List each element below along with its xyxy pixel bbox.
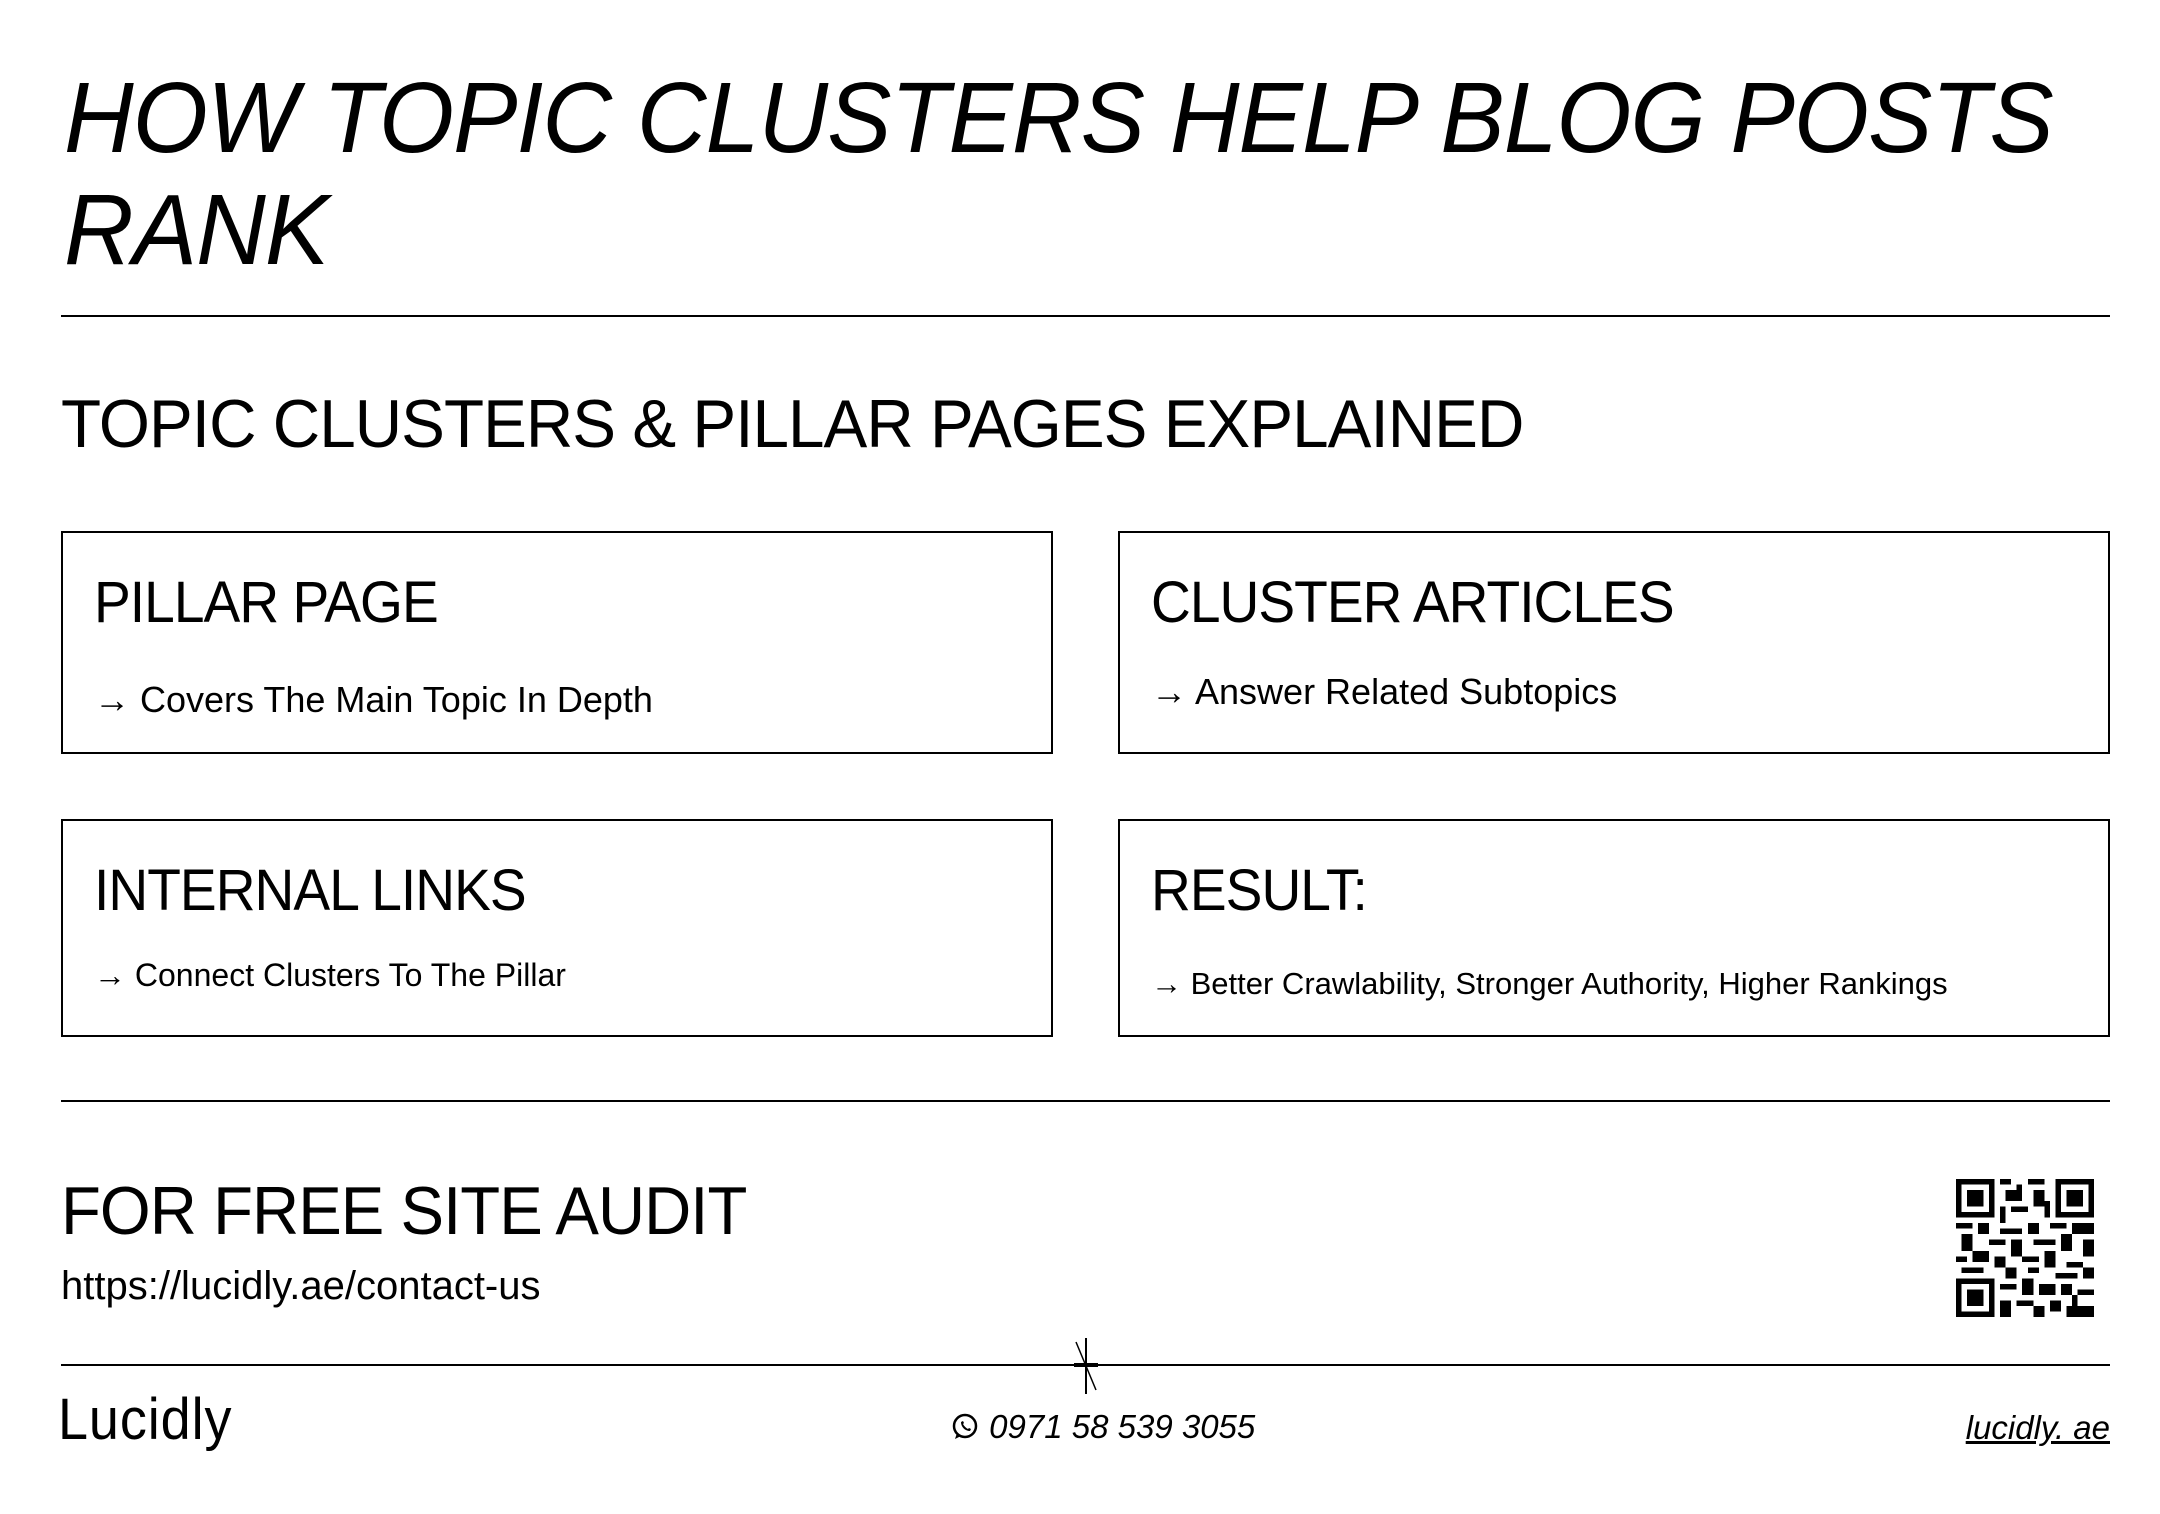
title — [64, 62, 2053, 286]
text: cluster description: → Answer Related Subtopics — [1151, 671, 1617, 712]
heading: pillar page: PILLAR PAGE — [94, 570, 438, 635]
text: pillar description: → Covers The Main Topic In Depth — [94, 679, 653, 720]
panel: cluster articles — [1118, 531, 2110, 754]
heading: internal links: INTERNAL LINKS — [94, 858, 526, 923]
icon: sparkle mark — [1074, 1338, 1098, 1394]
panel: internal links — [61, 819, 1053, 1037]
contact: phone: 0971 58 539 3055 — [989, 1408, 1255, 1445]
icon: qr code — [1956, 1179, 2094, 1317]
text: result description: → Better Crawlability, Stronger Authority, Higher Rankings — [1151, 966, 1948, 1001]
heading: result: RESULT: — [1151, 858, 1367, 923]
title: HOW TOPIC CLUSTERS HELP BLOG POSTS — [64, 62, 2053, 174]
heading: cluster articles: CLUSTER ARTICLES — [1151, 570, 1674, 635]
icon: whatsapp — [952, 1414, 978, 1439]
title: RANK — [64, 174, 328, 286]
panel: result — [1118, 819, 2110, 1037]
text: internal links description: → Connect Clusters To The Pillar — [94, 957, 566, 993]
cta url: https://lucidly.ae/contact-us — [61, 1264, 540, 1308]
panel: pillar page — [61, 531, 1053, 754]
link: website: lucidly. ae — [1966, 1409, 2110, 1446]
cta heading: FOR FREE SITE AUDIT — [61, 1173, 746, 1249]
subtitle: TOPIC CLUSTERS & PILLAR PAGES EXPLAINED — [61, 386, 1523, 462]
logo: Lucidly: Lucidly — [58, 1387, 232, 1452]
